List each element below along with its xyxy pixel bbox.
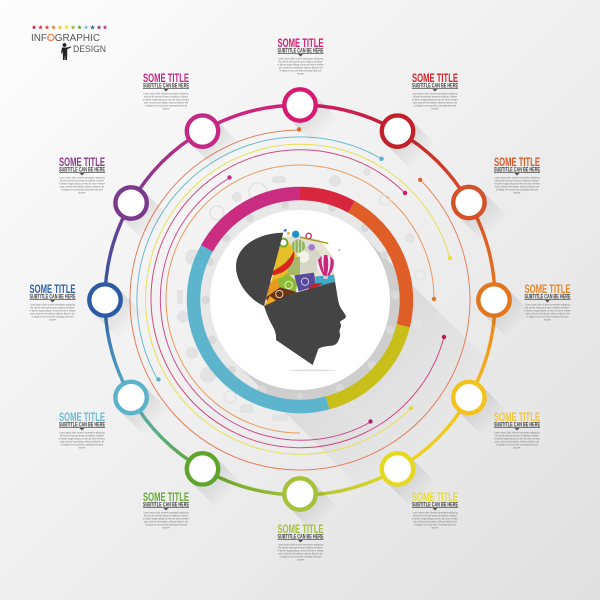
text block top: quis nostrud exercitation ullamco laboris nisi — [278, 66, 323, 70]
text block 11 o'clock: elit sed do eiusmod tempor incididunt ut labore — [144, 94, 188, 98]
text block 2 o'clock: Lorem ipsum dolor sit amet consectetur adipiscing — [494, 176, 540, 180]
disc shadow on band — [240, 240, 400, 400]
text block 10 o'clock: irure — [78, 190, 86, 194]
text block 5 o'clock — [412, 490, 458, 530]
text block 1 o'clock: irure — [432, 106, 439, 110]
text block 1 o'clock: SOME TITLE — [412, 71, 458, 85]
logo stars: ★ — [102, 24, 108, 32]
text block 10 o'clock: SUBTITLE CAN BE HERE — [59, 168, 105, 174]
text block 2 o'clock: quis nostrud exercitation ullamco laboris nisi — [495, 184, 539, 188]
balloon — [317, 255, 335, 279]
node 4 orange — [478, 284, 533, 339]
text block 7 o'clock: Lorem ipsum dolor sit amet consectetur adipiscing — [144, 510, 189, 514]
text block 7 o'clock: irure — [162, 526, 170, 530]
text block 8 o'clock — [59, 410, 105, 450]
white centre disc — [210, 210, 390, 390]
text block 9 o'clock: irure — [49, 318, 57, 322]
logo stars — [31, 24, 108, 32]
arc: yellow — [146, 144, 452, 454]
text block 8 o'clock: irure — [78, 446, 86, 450]
outer colored circle line — [105, 105, 495, 495]
arc: magenta inner — [160, 175, 373, 440]
ring segment: magenta — [207, 194, 300, 248]
arc: cyan — [137, 137, 384, 382]
text block 8 o'clock: SUBTITLE CAN BE HERE — [59, 422, 105, 428]
text block 11 o'clock: quis nostrud exercitation ullamco laboris nisi — [144, 100, 188, 104]
text block 3 o'clock: Lorem ipsum dolor sit amet consectetur adipiscing — [525, 302, 570, 306]
logo stars: ★ — [77, 24, 83, 32]
logo word DESIGN: DESIGN — [73, 44, 106, 55]
text block 8 o'clock: quis nostrud exercitation ullamco laboris nisi — [60, 440, 104, 444]
logo stars: ★ — [38, 24, 44, 32]
text block 11 o'clock: Lorem ipsum dolor sit amet consectetur adipiscing — [144, 92, 189, 96]
text block 7 o'clock: ut aliquip ex ea commodo consequat duis aute — [145, 522, 187, 526]
text block 1 o'clock: elit sed do eiusmod tempor incididunt ut labore — [413, 94, 457, 98]
node 10 blue — [89, 284, 144, 339]
text block 10 o'clock: Lorem ipsum dolor sit amet consectetur adipiscing — [60, 176, 105, 180]
text block 7 o'clock: SOME TITLE — [143, 490, 189, 504]
text block 10 o'clock: quis nostrud exercitation ullamco laboris nisi — [60, 184, 104, 188]
logo stars: ★ — [31, 24, 37, 32]
text block 5 o'clock: irure — [432, 526, 439, 530]
colorful ideas — [264, 228, 335, 306]
text block 5 o'clock: SOME TITLE — [412, 490, 458, 504]
text block 8 o'clock: et dolore magna aliqua ut enim ad minim veniam — [59, 436, 105, 440]
text block 2 o'clock — [494, 155, 540, 194]
text block top: ut aliquip ex ea commodo consequat duis aute — [280, 68, 322, 72]
text block 9 o'clock: et dolore magna aliqua ut enim ad minim veniam — [30, 308, 76, 312]
text block 10 o'clock: ut aliquip ex ea commodo consequat duis aute — [61, 188, 103, 192]
text block 3 o'clock: SOME TITLE — [524, 282, 570, 296]
text block 1 o'clock: et dolore magna aliqua ut enim ad minim veniam — [412, 98, 458, 102]
node 2 red — [382, 115, 437, 170]
text block 9 o'clock: SOME TITLE — [30, 282, 76, 296]
band icons — [202, 201, 400, 399]
logo stars: ★ — [90, 24, 96, 32]
text block 4 o'clock: SOME TITLE — [494, 410, 540, 424]
node 8 green — [187, 453, 242, 508]
text block 7 o'clock — [143, 490, 189, 530]
text block 11 o'clock: SOME TITLE — [143, 71, 189, 85]
text block 4 o'clock: irure — [514, 446, 521, 450]
text block 9 o'clock: quis nostrud exercitation ullamco laboris nisi — [30, 312, 75, 316]
text block 9 o'clock: ut aliquip ex ea commodo consequat duis aute — [32, 314, 74, 318]
node 12 pink — [187, 115, 242, 170]
text block 11 o'clock: irure — [162, 106, 170, 110]
node 6 yellow — [382, 453, 437, 508]
logo word INFOGRAPHIC: INFOGRAPHIC — [31, 33, 101, 44]
text block 8 o'clock: SOME TITLE — [59, 410, 105, 424]
text block 10 o'clock: et dolore magna aliqua ut enim ad minim veniam — [59, 182, 105, 186]
text block 3 o'clock: irure — [544, 318, 552, 322]
logo stars: ★ — [83, 24, 89, 32]
text block 4 o'clock: elit sed do eiusmod tempor incididunt ut labore — [495, 434, 539, 438]
centre disc band — [187, 187, 413, 413]
text block 7 o'clock: quis nostrud exercitation ullamco laboris nisi — [144, 520, 188, 524]
text block 5 o'clock: ut aliquip ex ea commodo consequat duis aute — [414, 522, 456, 526]
text block top: et dolore magna aliqua ut enim ad minim veniam — [278, 62, 324, 66]
text block 8 o'clock: elit sed do eiusmod tempor incididunt ut labore — [60, 434, 104, 438]
text block 3 o'clock: et dolore magna aliqua ut enim ad minim veniam — [524, 308, 570, 312]
pale icon cloud around the ring — [177, 168, 425, 421]
logo: infographic design — [31, 24, 108, 60]
text block 11 o'clock: ut aliquip ex ea commodo consequat duis aute — [145, 104, 187, 108]
text block top: SOME TITLE — [278, 36, 324, 50]
text block 3 o'clock: SUBTITLE CAN BE HERE — [524, 294, 570, 300]
logo stars: ★ — [57, 24, 63, 32]
text block 10 o'clock: elit sed do eiusmod tempor incididunt ut labore — [60, 178, 104, 182]
head silhouette — [264, 282, 346, 365]
node 9 cyan — [115, 382, 170, 437]
text block 4 o'clock: SUBTITLE CAN BE HERE — [494, 422, 540, 428]
head illustration — [236, 228, 346, 371]
text block 1 o'clock — [412, 71, 458, 110]
text block 3 o'clock: quis nostrud exercitation ullamco laboris nisi — [526, 312, 570, 316]
ring segment: yellow green — [328, 326, 403, 403]
ring segment: orange — [352, 207, 406, 326]
text block bottom: Lorem ipsum dolor sit amet consectetur adipiscing — [278, 542, 323, 546]
text block 9 o'clock: elit sed do eiusmod tempor incididunt ut labore — [30, 306, 75, 310]
text block 9 o'clock: SUBTITLE CAN BE HERE — [30, 294, 76, 300]
thin orbit arcs — [130, 127, 470, 470]
text block 4 o'clock: et dolore magna aliqua ut enim ad minim veniam — [494, 436, 540, 440]
text block 2 o'clock: ut aliquip ex ea commodo consequat duis aute — [496, 188, 538, 192]
text block 5 o'clock: elit sed do eiusmod tempor incididunt ut labore — [413, 514, 457, 518]
text block bottom: elit sed do eiusmod tempor incididunt ut labore — [278, 546, 323, 550]
text block 8 o'clock: ut aliquip ex ea commodo consequat duis aute — [61, 442, 103, 446]
arc: magenta long — [151, 150, 446, 448]
text block 8 o'clock: Lorem ipsum dolor sit amet consectetur adipiscing — [60, 430, 105, 434]
text block top: irure — [297, 72, 305, 76]
node 7 lime — [284, 478, 339, 533]
text block 1 o'clock: SUBTITLE CAN BE HERE — [412, 84, 458, 90]
node 11 purple — [115, 187, 170, 242]
text block 2 o'clock: SUBTITLE CAN BE HERE — [494, 168, 540, 174]
text block bottom: et dolore magna aliqua ut enim ad minim veniam — [278, 548, 324, 552]
logo stars: ★ — [51, 24, 57, 32]
ground shadow — [288, 369, 336, 371]
text block bottom: ut aliquip ex ea commodo consequat duis aute — [280, 554, 322, 558]
text block bottom — [278, 522, 324, 562]
text block 9 o'clock: Lorem ipsum dolor sit amet consectetur adipiscing — [30, 302, 75, 306]
text block top: SUBTITLE CAN BE HERE — [278, 48, 324, 54]
text block top — [278, 36, 324, 76]
icon: presenter figure — [61, 43, 71, 60]
text block 2 o'clock: irure — [514, 190, 521, 194]
text block 2 o'clock: SOME TITLE — [494, 155, 540, 169]
text block 3 o'clock — [524, 282, 570, 322]
text block 7 o'clock: et dolore magna aliqua ut enim ad minim veniam — [143, 516, 189, 520]
logo stars: ★ — [64, 24, 70, 32]
text block 1 o'clock: Lorem ipsum dolor sit amet consectetur adipiscing — [412, 92, 458, 96]
arc: outer orange — [130, 127, 470, 470]
arc: orange inner — [166, 165, 436, 433]
text block 2 o'clock: et dolore magna aliqua ut enim ad minim veniam — [494, 182, 540, 186]
text block 5 o'clock: quis nostrud exercitation ullamco laboris nisi — [413, 520, 457, 524]
text block 11 o'clock: SUBTITLE CAN BE HERE — [143, 84, 189, 90]
text block 4 o'clock: quis nostrud exercitation ullamco laboris nisi — [495, 440, 539, 444]
node 3 red orange — [453, 187, 508, 242]
ring segment: red — [300, 194, 352, 207]
text block 5 o'clock: et dolore magna aliqua ut enim ad minim veniam — [412, 516, 458, 520]
text block 4 o'clock — [494, 410, 540, 450]
text block 11 o'clock — [143, 71, 189, 110]
node 1 magenta — [284, 89, 339, 144]
text block 4 o'clock: ut aliquip ex ea commodo consequat duis aute — [496, 442, 538, 446]
text block bottom: quis nostrud exercitation ullamco laboris nisi — [278, 552, 323, 556]
logo stars: ★ — [70, 24, 76, 32]
text block 3 o'clock: ut aliquip ex ea commodo consequat duis aute — [526, 314, 569, 318]
text block 7 o'clock: elit sed do eiusmod tempor incididunt ut labore — [144, 514, 188, 518]
head flap — [236, 233, 283, 306]
text block 7 o'clock: SUBTITLE CAN BE HERE — [143, 502, 189, 508]
text block 2 o'clock: elit sed do eiusmod tempor incididunt ut labore — [495, 178, 539, 182]
text block 11 o'clock: et dolore magna aliqua ut enim ad minim veniam — [143, 98, 189, 102]
logo stars: ★ — [96, 24, 102, 32]
text block 1 o'clock: ut aliquip ex ea commodo consequat duis aute — [414, 104, 456, 108]
ring segment: blue — [194, 248, 328, 407]
text block bottom: irure — [297, 558, 305, 562]
colored donut ring — [194, 194, 406, 407]
text block top: Lorem ipsum dolor sit amet consectetur adipiscing — [278, 56, 323, 60]
logo stars: ★ — [44, 24, 50, 32]
text block 10 o'clock: SOME TITLE — [59, 155, 105, 169]
text block 9 o'clock — [30, 282, 76, 322]
text block 4 o'clock: Lorem ipsum dolor sit amet consectetur adipiscing — [494, 430, 540, 434]
node 5 amber — [453, 382, 508, 437]
long shadow of centre disc — [236, 236, 505, 505]
text block 5 o'clock: SUBTITLE CAN BE HERE — [412, 502, 458, 508]
text block 3 o'clock: elit sed do eiusmod tempor incididunt ut labore — [526, 306, 570, 310]
text block 10 o'clock — [59, 155, 105, 194]
text block 1 o'clock: quis nostrud exercitation ullamco laboris nisi — [413, 100, 457, 104]
text block 5 o'clock: Lorem ipsum dolor sit amet consectetur adipiscing — [412, 510, 458, 514]
text block bottom: SUBTITLE CAN BE HERE — [278, 534, 324, 540]
text block top: elit sed do eiusmod tempor incididunt ut labore — [278, 60, 323, 64]
text block bottom: SOME TITLE — [278, 522, 324, 536]
